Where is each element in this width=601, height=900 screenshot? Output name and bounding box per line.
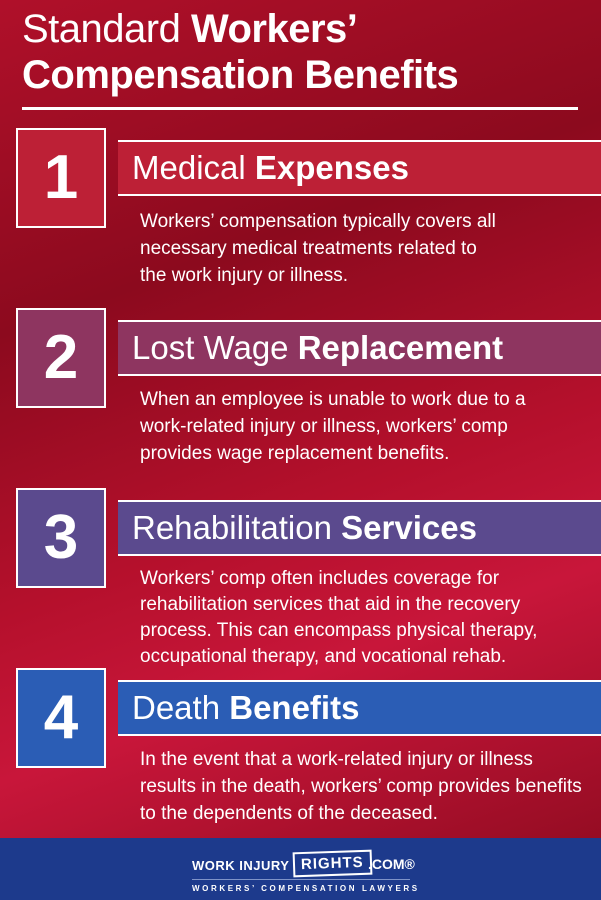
heading 2: Lost Wage Replacement: [132, 329, 503, 366]
heading 2: [118, 320, 601, 376]
heading 1: [118, 140, 601, 196]
title: [22, 7, 458, 97]
number box 4: 4: [44, 683, 78, 752]
text 3: Workers’ comp often includes coverage for rehabilitation services that aid in the recovery process. This can encompass physical therapy, occupational therapy, and vocational rehab.: [140, 568, 537, 667]
text 1: Workers’ compensation typically covers all: [140, 211, 496, 232]
number box 3: 3: [44, 503, 78, 572]
item 3: [16, 488, 601, 667]
number box 2: 2: [44, 323, 78, 392]
text 1: necessary medical treatments related to: [140, 238, 477, 259]
footer logo: RIGHTS: [301, 854, 364, 873]
footer logo: [0, 838, 601, 900]
heading 3: Rehabilitation Services: [132, 509, 477, 546]
title: Compensation Benefits: [22, 53, 458, 97]
footer logo: WORK INJURY: [192, 858, 289, 873]
item 2: [16, 308, 601, 464]
text 2: When an employee is unable to work due to a work-related injury or illness, workers’ comp provides wage replacement benefits.: [140, 389, 526, 464]
text 1: the work injury or illness.: [140, 265, 348, 286]
text 4: In the event that a work-related injury or illness results in the death, workers’ comp provides benefits to the dependents of the deceased.: [140, 749, 582, 824]
text 1: [140, 211, 496, 286]
number box 1: 1: [44, 143, 78, 212]
footer logo: WORKERS’ COMPENSATION LAWYERS: [192, 884, 420, 893]
number box 2: [16, 308, 106, 408]
footer logo: .COM®: [368, 856, 415, 872]
heading 1: Medical Expenses: [132, 149, 409, 186]
item 4: [16, 668, 601, 824]
title: Standard Workers’: [22, 7, 357, 51]
heading 4: Death Benefits: [132, 689, 359, 726]
item 1: [16, 128, 601, 286]
heading 4: [118, 680, 601, 736]
number box 4: [16, 668, 106, 768]
number box 1: [16, 128, 106, 228]
heading 3: [118, 500, 601, 556]
number box 3: [16, 488, 106, 588]
